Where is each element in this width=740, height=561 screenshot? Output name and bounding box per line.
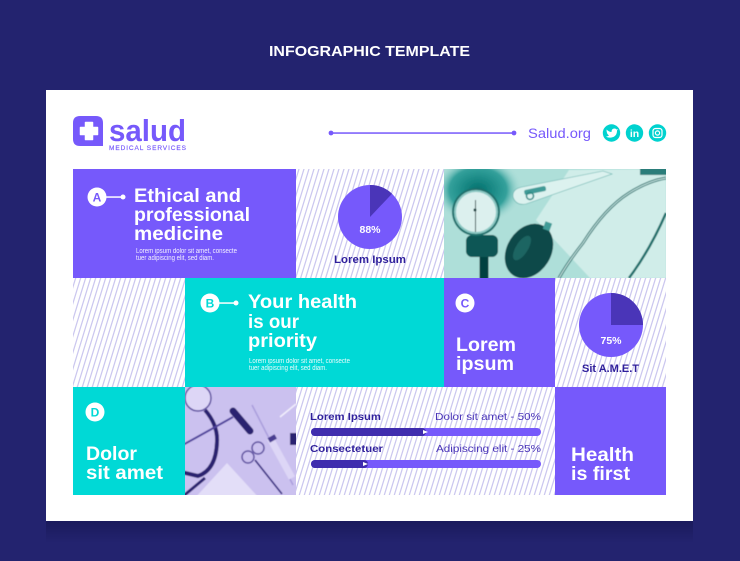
white card bbox=[46, 90, 693, 521]
panel: health is first bbox=[555, 387, 666, 495]
heading B bbox=[248, 291, 357, 352]
badge D: D bbox=[91, 406, 100, 420]
icon: linkedin bbox=[626, 124, 643, 142]
header connector line bbox=[329, 131, 516, 135]
heading D: sit amet bbox=[86, 462, 164, 484]
website label: Salud.org bbox=[528, 125, 591, 141]
body text A: Lorem ipsum dolor sit amet, consecte bbox=[136, 248, 237, 255]
progress row 1: Lorem Ipsum bbox=[310, 411, 381, 423]
panel shadow bbox=[46, 521, 693, 543]
progress row 2 bbox=[310, 443, 541, 468]
progress row 2: Consectetuer bbox=[310, 443, 383, 455]
icon: twitter bbox=[603, 124, 620, 142]
pie label: Lorem Ipsum bbox=[334, 254, 406, 266]
progress panel bbox=[310, 411, 541, 468]
panel: C lorem ipsum bbox=[444, 278, 555, 387]
heading A: professional bbox=[134, 204, 250, 226]
heading C bbox=[456, 334, 516, 375]
photo: stethoscope, scissors and syringe bbox=[185, 387, 296, 495]
body text B: tuer adipiscing elit, sed diam. bbox=[249, 365, 327, 372]
badge B bbox=[200, 294, 238, 312]
pie chart: 88%: 88% bbox=[359, 224, 381, 236]
progress row 1: Dolor sit amet - 50% bbox=[435, 411, 541, 423]
heading D: Dolor bbox=[86, 443, 137, 465]
heading B: priority bbox=[248, 330, 317, 352]
panel: B your health bbox=[185, 278, 444, 387]
badge A bbox=[88, 188, 126, 206]
panel: A ethical medicine bbox=[73, 169, 296, 278]
badge B: B bbox=[206, 296, 215, 310]
heading A: Ethical and bbox=[134, 185, 241, 207]
pie chart: 75%: 75% bbox=[600, 335, 622, 347]
body text B: Lorem ipsum dolor sit amet, consecte bbox=[249, 358, 350, 365]
icon: instagram bbox=[649, 124, 666, 142]
body text A bbox=[136, 248, 237, 262]
heading A bbox=[134, 185, 250, 245]
photo: blood pressure cuff and stethoscope bbox=[444, 169, 666, 278]
badge A: A bbox=[93, 190, 102, 204]
pie chart: 88% bbox=[334, 185, 406, 266]
progress row 1 bbox=[310, 411, 541, 436]
logo bbox=[73, 113, 187, 152]
heading C: ipsum bbox=[456, 353, 514, 375]
icon: medical cross bbox=[73, 116, 103, 146]
heading B: Your health bbox=[248, 291, 357, 313]
heading B: is our bbox=[248, 311, 299, 333]
heading health: is first bbox=[571, 463, 630, 485]
body text B bbox=[249, 358, 350, 372]
progress row 2: Adipiscing elit - 25% bbox=[436, 443, 541, 455]
logo tagline: MEDICAL SERVICES bbox=[109, 145, 187, 152]
badge C: C bbox=[461, 296, 470, 310]
logo wordmark: salud bbox=[109, 113, 186, 148]
hatched background tiles bbox=[0, 224, 740, 441]
body text A: tuer adipiscing elit, sed diam. bbox=[136, 255, 214, 262]
heading health bbox=[571, 444, 634, 485]
heading C: Lorem bbox=[456, 334, 516, 356]
pie label: Sit A.M.E.T bbox=[582, 363, 639, 375]
icon: linkedin: in bbox=[630, 128, 639, 140]
heading health: Health bbox=[571, 444, 634, 466]
heading D bbox=[86, 443, 164, 484]
panel: D dolor sit amet bbox=[73, 387, 185, 495]
heading A: medicine bbox=[134, 223, 223, 245]
title: INFOGRAPHIC TEMPLATE bbox=[269, 43, 470, 60]
pie chart: 75% bbox=[579, 293, 643, 375]
